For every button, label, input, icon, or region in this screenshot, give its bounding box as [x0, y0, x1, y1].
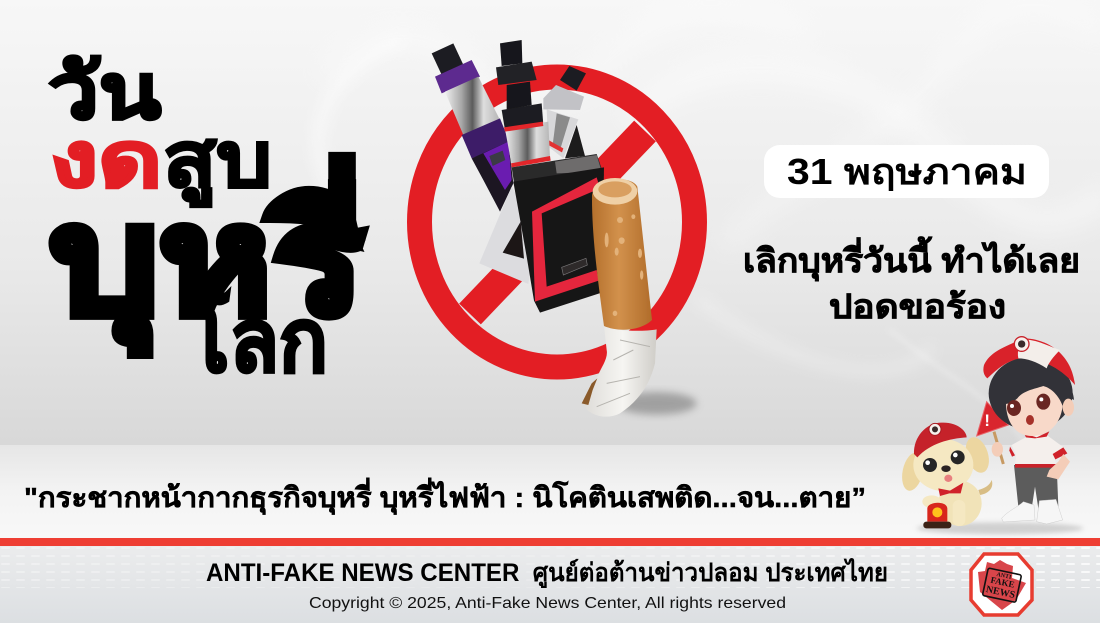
dog body [938, 481, 982, 526]
anti fake news logo: NEWS [985, 584, 1016, 601]
background wall [0, 0, 1100, 445]
prohibition sign [420, 77, 694, 367]
date text: 31 พฤษภาคม [787, 151, 1027, 192]
dog tail [978, 480, 992, 495]
title word: บุหรี่: บุหรี่ [50, 156, 364, 355]
title word: วัน: วัน [48, 50, 161, 135]
title word: โลก: โลก [185, 290, 328, 390]
hair and face [989, 357, 1073, 430]
footer organisation name: ANTI-FAKE NEWS CENTER ศูนย์ต่อต้านข่าวปลอม ประเทศไทย [206, 557, 888, 589]
boy mascot: ! [984, 411, 990, 430]
vape devices and cigarette [432, 40, 697, 417]
date pill [764, 145, 1049, 198]
title: world no tobacco day [48, 50, 364, 390]
small chrome tank [543, 66, 586, 158]
title word: งด: งด [50, 118, 162, 203]
slogan [743, 236, 1080, 325]
dog ears [899, 451, 926, 493]
footer copyright: Copyright © 2025, Anti-Fake News Center, All rights reserved [309, 595, 786, 612]
silver vape [479, 125, 585, 284]
anti fake news logo [971, 554, 1032, 615]
red divider bar [0, 538, 1100, 546]
background smoke [318, 4, 1100, 450]
warning sign [977, 402, 1008, 436]
mascots [899, 337, 1083, 534]
dog bow tie [938, 483, 963, 496]
siren lamp [927, 503, 947, 522]
torso [1012, 435, 1065, 467]
legs [1014, 465, 1058, 508]
black vape body [513, 167, 604, 313]
slogan line 2: ปอดขอร้อง [829, 288, 1006, 325]
dog mascot [899, 423, 993, 528]
purple vape [432, 43, 513, 212]
shoes [1002, 502, 1035, 522]
dog head [913, 439, 973, 491]
slogan line 1: เลิกบุหรี่วันนี้ ทำได้เลย [743, 236, 1080, 282]
arms [992, 442, 1003, 457]
dog legs [953, 500, 965, 526]
cigarette butt shadow [617, 392, 697, 415]
footer panel [0, 546, 1100, 623]
anti fake news logo: ANTI [996, 572, 1012, 581]
background floor band [0, 445, 1100, 538]
ground shadow [917, 522, 1083, 534]
theme tagline: "กระชากหน้ากากธุรกิจบุหรี่ บุหรี่ไฟฟ้า : นิโคตินเสพติด...จน...ตาย” [24, 477, 866, 515]
title word: สูบ: สูบ [163, 118, 272, 207]
black vape tank [496, 40, 604, 183]
dog cap [914, 423, 967, 457]
cap [983, 338, 1075, 385]
cigarette butt [582, 178, 657, 417]
boy mascot [977, 337, 1075, 524]
anti fake news logo: FAKE [990, 575, 1016, 590]
